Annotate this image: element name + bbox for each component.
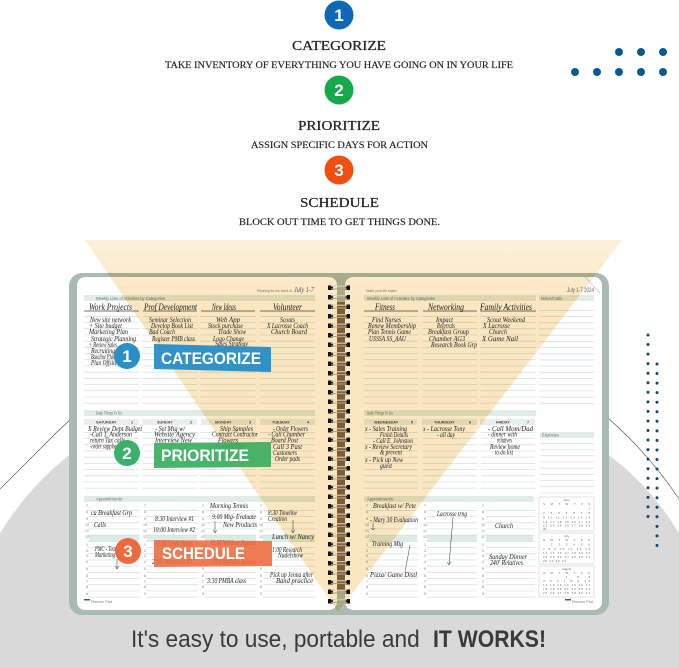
right page: 7	[527, 420, 529, 424]
step 1 badge: 1	[334, 6, 344, 25]
left page: TUESDAY	[272, 420, 290, 424]
left page: Band practice	[276, 576, 314, 585]
left page: 3	[249, 420, 251, 424]
left page: -Call T. Anderson	[90, 430, 132, 438]
left page: X Lacrosse Coach	[266, 321, 308, 330]
mini calendars: 18 19 20 21 22 23 24	[543, 587, 590, 591]
mini calendars: June	[563, 498, 570, 502]
step 2 badge	[324, 76, 354, 104]
left page: 2	[190, 420, 192, 424]
mini calendars: July	[564, 534, 570, 538]
right page: & prevent	[380, 448, 403, 456]
right page: Make your life easier	[366, 289, 398, 293]
left page: X Review Dept Budget	[87, 424, 143, 433]
left page: Morning Tennis	[209, 501, 248, 510]
left page: New Products	[222, 520, 257, 529]
step 1 description: TAKE INVENTORY OF EVERYTHING YOU HAVE GOING ON IN YOUR LIFE	[165, 60, 514, 70]
spiral binding	[328, 285, 350, 608]
left page: ca Breakfast Grp	[91, 508, 132, 517]
right page: 240' Relatives	[490, 558, 523, 567]
left page: Planning for the week of	[257, 289, 292, 293]
left page: -order supplies	[90, 442, 118, 450]
left page: Web App	[216, 315, 240, 324]
schedule label: 3	[123, 542, 133, 561]
right page: Daily Things To Do	[367, 411, 393, 416]
left page: - Call Chamber	[268, 430, 305, 438]
left page: - Set Mtg w/	[155, 424, 186, 433]
right page: Sunday Dinner	[489, 552, 527, 561]
right page: - Mary 30 Evaluation	[370, 515, 418, 524]
left page: Stock purchase	[208, 321, 243, 330]
left page: 8:30 Timeline	[268, 508, 297, 517]
left page: Register PMB class	[151, 334, 195, 343]
mini calendars: 25 26 27 28 29 30 31	[543, 591, 590, 595]
left page: Call 3 Past	[273, 442, 303, 451]
left page: Strategic Planning	[91, 334, 136, 343]
left page: Prof Development	[143, 302, 197, 313]
right page: Review home	[489, 442, 520, 451]
left page: 1	[131, 420, 133, 424]
right page: Networking	[427, 303, 464, 313]
right page: Church	[495, 521, 513, 530]
left page: MONDAY	[215, 420, 232, 424]
step 1 heading: CATEGORIZE	[292, 39, 386, 54]
left page: Appointments	[96, 497, 123, 502]
left page: Daily Things To Do	[96, 411, 122, 416]
right page: Scout Weekend	[487, 315, 525, 324]
left page: Planner Pad	[91, 600, 112, 604]
mini calendars: S M T W T F S	[543, 538, 590, 542]
right page: Find Nurses	[371, 315, 401, 324]
left page: return Tax calls	[90, 436, 125, 444]
left page: Order pads	[275, 454, 300, 463]
dots top right	[571, 48, 667, 76]
left page: Lunch w/ Nancy	[271, 532, 315, 541]
right page: July 1-7 2024	[567, 287, 594, 294]
step 3 badge	[324, 156, 354, 184]
planner cover	[69, 273, 609, 615]
right page: - Call E. Johnston	[373, 436, 413, 445]
left page: 2:30 Interview #3	[152, 557, 192, 566]
planner	[69, 273, 609, 615]
left page: 789101112123456789	[143, 504, 147, 596]
footer tagline: IT WORKS!	[433, 626, 546, 653]
right page: 6	[469, 420, 471, 424]
left page: 10:00 Interview #2	[153, 525, 195, 534]
mini calendars: S M T W T F S	[543, 571, 590, 575]
mini calendars: 1	[589, 506, 591, 510]
left page: Creation	[268, 514, 287, 523]
left page: Bad Coach	[149, 327, 175, 336]
left page: July 1-7	[294, 286, 314, 294]
step 2 description: ASSIGN SPECIFIC DAYS FOR ACTION	[251, 140, 429, 150]
left page: + Site budget	[89, 321, 123, 330]
left page: Board Post	[271, 436, 299, 444]
prioritize label: 2	[122, 444, 132, 463]
right page: Breakfast w/ Pete	[373, 501, 416, 510]
categorize label	[114, 343, 271, 372]
left page: Recruiting	[90, 346, 115, 355]
mini calendars: 30	[543, 527, 547, 531]
footer tagline: It's easy to use, portable and	[131, 626, 426, 653]
left page: Plan Offsite	[90, 358, 117, 367]
left page: 12:00 Webinar Agency	[210, 538, 256, 547]
mini calendars: 2 3 4 5 6 7 8	[543, 511, 590, 515]
left page: Develop Book List	[150, 321, 194, 330]
left page: Seminar Selection	[149, 315, 191, 324]
mini calendars: 16 17 18 19 20 21 22	[543, 520, 590, 524]
right page: Family Activities	[479, 303, 532, 313]
left page: 9:00 Mtg- Evaluate	[212, 512, 256, 521]
right page: Church	[489, 327, 507, 336]
left page: 8:30 Interview #1	[155, 514, 194, 523]
left page: Agenda Mtg	[214, 442, 245, 450]
left page: Volunteer	[273, 303, 302, 313]
schedule label: SCHEDULE	[162, 544, 245, 563]
step 2 heading: PRIORITIZE	[298, 119, 380, 134]
left page: Logo Change	[212, 334, 244, 343]
left page: PMC - Team	[94, 544, 118, 553]
right page: USSSA SS_AAU	[369, 334, 406, 343]
mini calendars: 9 10 11 12 13 14 15	[543, 516, 590, 520]
left page: - Order Flowers	[273, 424, 308, 433]
left page: SATURDAY	[96, 420, 117, 424]
left page: 789101112123456789	[201, 504, 205, 596]
right page: X Game Nail	[481, 334, 518, 343]
step 2 badge: 2	[334, 81, 344, 100]
left page: + Review Sales	[89, 340, 117, 349]
left page: Baseline Plan	[91, 352, 115, 361]
left page: 1:00 Research	[272, 545, 302, 554]
thin curve lines	[0, 418, 679, 499]
step 3 heading: SCHEDULE	[300, 196, 379, 211]
right page: Finish Details	[379, 430, 408, 439]
right page: to do list	[495, 448, 514, 456]
right page: Breakfast Group	[428, 327, 469, 336]
left page: New site network	[89, 315, 131, 324]
mini calendars: 11 12 13 14 15 16 17	[543, 583, 590, 587]
right page: Notes/Calls	[541, 296, 563, 301]
left page: Nadelshow	[277, 550, 304, 560]
left page: Website Agency	[154, 430, 196, 438]
mini calendars	[539, 497, 594, 597]
prioritize label: PRIORITIZE	[161, 446, 249, 465]
right page: Planner Pad	[572, 600, 593, 604]
right page	[345, 277, 602, 610]
schedule label	[115, 538, 272, 567]
prioritize label	[114, 440, 271, 468]
right page: 789101112123456789	[423, 504, 427, 596]
right page: Chamber AG3	[429, 334, 465, 343]
left page: Flowers	[217, 436, 238, 444]
right page: 789101112123456789	[481, 504, 485, 596]
mini calendars: 23 24 25 26 27 28 29	[543, 524, 590, 528]
right page: x - Lacrosse Tony	[422, 424, 465, 433]
left page: Trade Show	[218, 327, 247, 336]
left page: Weekly Lists of Activities by Categories	[96, 296, 166, 301]
mini calendars: 7 8 9 10 11 12 13	[543, 547, 590, 551]
right page: Expenses	[542, 433, 560, 438]
gray background shape	[0, 453, 679, 668]
left page: New Ideas	[211, 303, 236, 313]
left page: Calls	[94, 520, 106, 529]
highlight triangle	[85, 240, 622, 612]
right page: Research Book Grp	[430, 340, 477, 349]
right page: 789101112123456789	[365, 504, 369, 596]
right page: x - Pick up New	[364, 455, 404, 464]
left page: 789101112123456789	[85, 504, 89, 596]
right page: Fitness	[374, 303, 395, 313]
step 3 badge: 3	[334, 161, 344, 180]
left page: Pick up Jenna after	[269, 570, 313, 579]
left page: Customers	[273, 448, 297, 457]
right page: WEDNESDAY	[374, 420, 399, 424]
mini calendars: S M T W T F S	[543, 502, 590, 506]
right page: relatives	[497, 436, 512, 444]
left page: Scouts	[280, 315, 295, 324]
right page: Pizza/ Game Distl	[369, 570, 417, 579]
dots right	[648, 335, 657, 547]
left page: Ship Samples	[220, 424, 253, 433]
left page: Interview New	[154, 436, 193, 444]
spine	[337, 302, 345, 590]
right page: Appointments	[367, 497, 394, 502]
right page: x - Review Secretary	[364, 442, 412, 451]
right page: FRIDAY	[496, 420, 510, 424]
right page: THURSDAY	[434, 420, 455, 424]
right page: 5	[411, 420, 413, 424]
right page: Training Mtg	[372, 539, 403, 548]
left page: 12:00 Lunch Heads	[155, 539, 193, 548]
right page: Weekly Lists of Activities by Categories	[367, 296, 436, 301]
right page: x - Sales Training	[364, 424, 407, 433]
left page: Church Board	[271, 327, 307, 336]
right page: Impact	[435, 315, 454, 324]
left page: Marketing Plan	[88, 327, 128, 336]
left page: 3:30 PMBA class	[206, 576, 246, 585]
mini calendars: 1 2 3	[566, 575, 590, 579]
right page: Lacrosse trng	[436, 509, 467, 518]
right page: Referrals	[436, 321, 455, 330]
mini calendars: 4 5 6 7 8 9 10	[543, 579, 590, 583]
mini calendars: 14 15 16 17 18 19 20	[543, 551, 590, 555]
left page: 789101112123456789	[259, 504, 263, 596]
left page: Sales Strategy	[215, 339, 248, 348]
categorize label: 1	[122, 347, 132, 366]
left page: Marketing	[94, 550, 115, 559]
right page: - all day	[437, 430, 455, 439]
left page: Contract Contractor	[212, 430, 258, 438]
mini calendars: 28 29 30 31	[543, 559, 566, 563]
right page: guest	[380, 461, 393, 470]
right page: - Call Mom/Dad	[488, 424, 533, 433]
right page: X Lacrosse	[482, 321, 510, 330]
right page: - dinner with	[488, 430, 517, 438]
left page: SUNDAY	[157, 420, 173, 424]
categorize label: CATEGORIZE	[161, 349, 261, 368]
left page: Work Projects	[89, 303, 132, 313]
right page: Plan Tennis Game	[367, 327, 411, 336]
left page	[77, 277, 337, 610]
left page: 2:00 Employee Review	[209, 557, 257, 566]
mini calendars: 21 22 23 24 25 26 27	[543, 555, 590, 559]
step 1 badge	[324, 0, 354, 30]
mini calendars: August	[562, 567, 571, 571]
left page: 4	[307, 420, 310, 424]
step 3 description: BLOCK OUT TIME TO GET THINGS DONE.	[239, 217, 440, 227]
mini calendars: 1 2 3 4 5 6	[551, 542, 590, 546]
right page: Renew Membership	[367, 321, 416, 330]
